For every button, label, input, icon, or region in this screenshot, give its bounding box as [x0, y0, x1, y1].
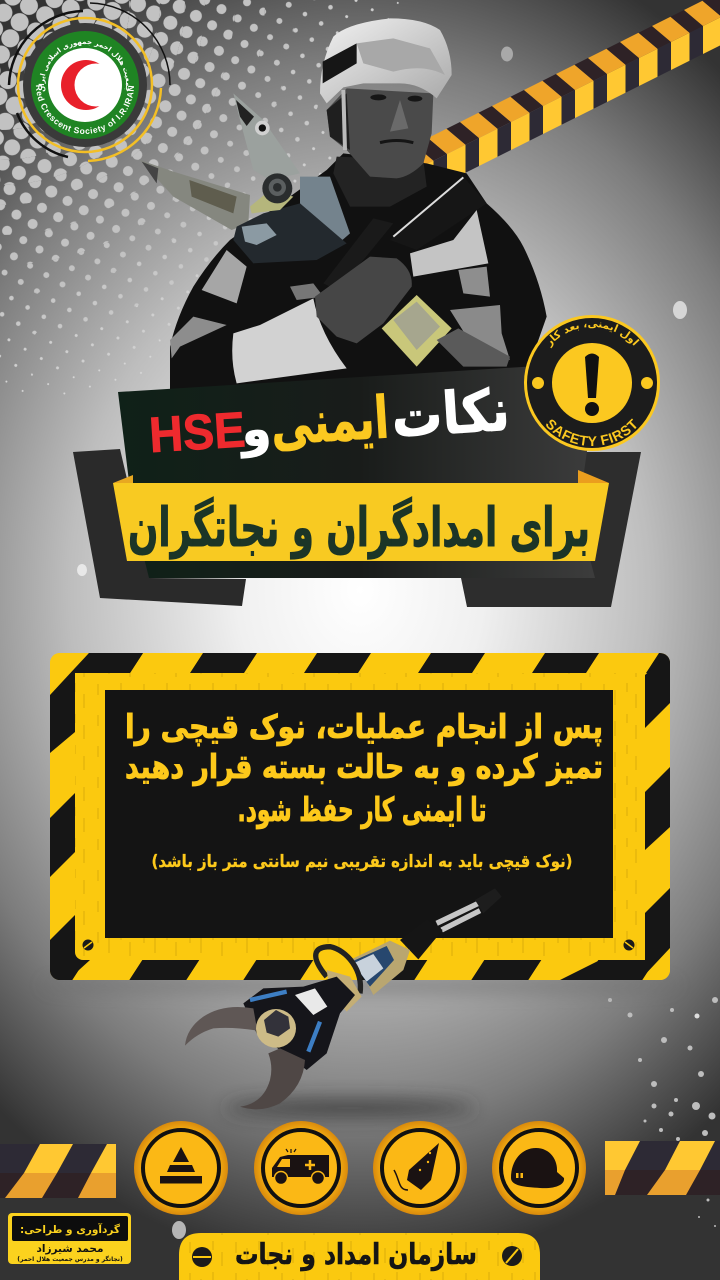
- title banner: back wings: [73, 360, 641, 607]
- panel text: تا ایمنی کار حفظ شود.: [238, 790, 486, 830]
- tool lower jaw: [140, 160, 250, 230]
- head: [243, 977, 355, 1070]
- safety first badge: اول ایمنی، بعد کار: [549, 322, 640, 348]
- hazard sign panel: [40, 653, 680, 993]
- logo ring text: [36, 41, 134, 134]
- helmet: [320, 18, 452, 103]
- halftone dot field: [0, 0, 388, 388]
- rescuer figure with hydraulic cutter: [140, 18, 547, 393]
- safety first badge: SAFETY FIRST: [546, 418, 636, 446]
- credit box: [8, 1213, 131, 1264]
- glove: [315, 257, 412, 343]
- hydraulic cutter photo: [185, 888, 502, 1109]
- carry handle: [316, 947, 360, 993]
- credit box: گردآوری و طراحی:: [20, 1223, 121, 1236]
- cylinder: [350, 941, 410, 995]
- tool upper jaw: [233, 93, 300, 180]
- logo ring text: Red Crescent Society of I.R.IRAN: [36, 85, 134, 134]
- title text: ایمنی: [269, 383, 391, 459]
- bottom hazard tape left: [0, 1144, 116, 1198]
- outer hazard frame: [50, 653, 670, 980]
- credit box: (نجاتگر و مدرس جمعیت هلال احمر): [17, 1255, 123, 1263]
- face: [327, 88, 433, 178]
- top-right hazard tape: [396, 0, 720, 198]
- gold cylinder: [382, 295, 452, 367]
- neck: [333, 157, 427, 207]
- bottom hazard tape right: [605, 1141, 720, 1195]
- safety first badge: [524, 315, 660, 451]
- screws: [82, 940, 634, 950]
- logo: Red Crescent Society: [8, 2, 171, 162]
- handle: [323, 218, 393, 290]
- panel text: (نوک قیچی باید به اندازه تقریبی نیم سانتی متر باز باشد): [152, 852, 572, 872]
- footer organisation plate: [179, 1233, 540, 1280]
- icon: ambulance: [254, 1121, 348, 1215]
- icon: hard hat: [492, 1121, 586, 1215]
- panel text: [125, 707, 603, 872]
- title text: [147, 376, 512, 466]
- title text: و: [237, 401, 273, 459]
- crescent: [61, 60, 118, 110]
- tool shadow: [225, 1099, 475, 1117]
- logo ring text: جمعیت هلال احمر جمهوری اسلامی ایران: [38, 41, 129, 92]
- credit box: محمد شیرزاد: [36, 1243, 104, 1255]
- icon: cutter jaws: [373, 1121, 467, 1215]
- hoses: [437, 903, 480, 930]
- reflective patches: [170, 210, 510, 383]
- panel text: تمیز کرده و به حالت بسته قرار دهید: [125, 747, 603, 787]
- gold collar: [327, 970, 362, 1012]
- panel text: پس از انجام عملیات، نوک قیچی را: [125, 707, 603, 747]
- lower blade: [240, 1048, 305, 1109]
- bolt: [256, 1009, 296, 1048]
- footer organisation plate: سازمان امداد و نجات: [235, 1237, 477, 1271]
- title text: HSE: [148, 401, 247, 463]
- upper blade: [185, 1007, 257, 1046]
- tool body: [300, 177, 350, 245]
- yellow ribbon subtitle: [113, 483, 609, 561]
- collar: [390, 177, 487, 250]
- exclamation mark: [585, 354, 599, 398]
- jacket: [170, 153, 547, 393]
- title text: نکات: [389, 376, 512, 451]
- icon: traffic cone: [134, 1121, 228, 1215]
